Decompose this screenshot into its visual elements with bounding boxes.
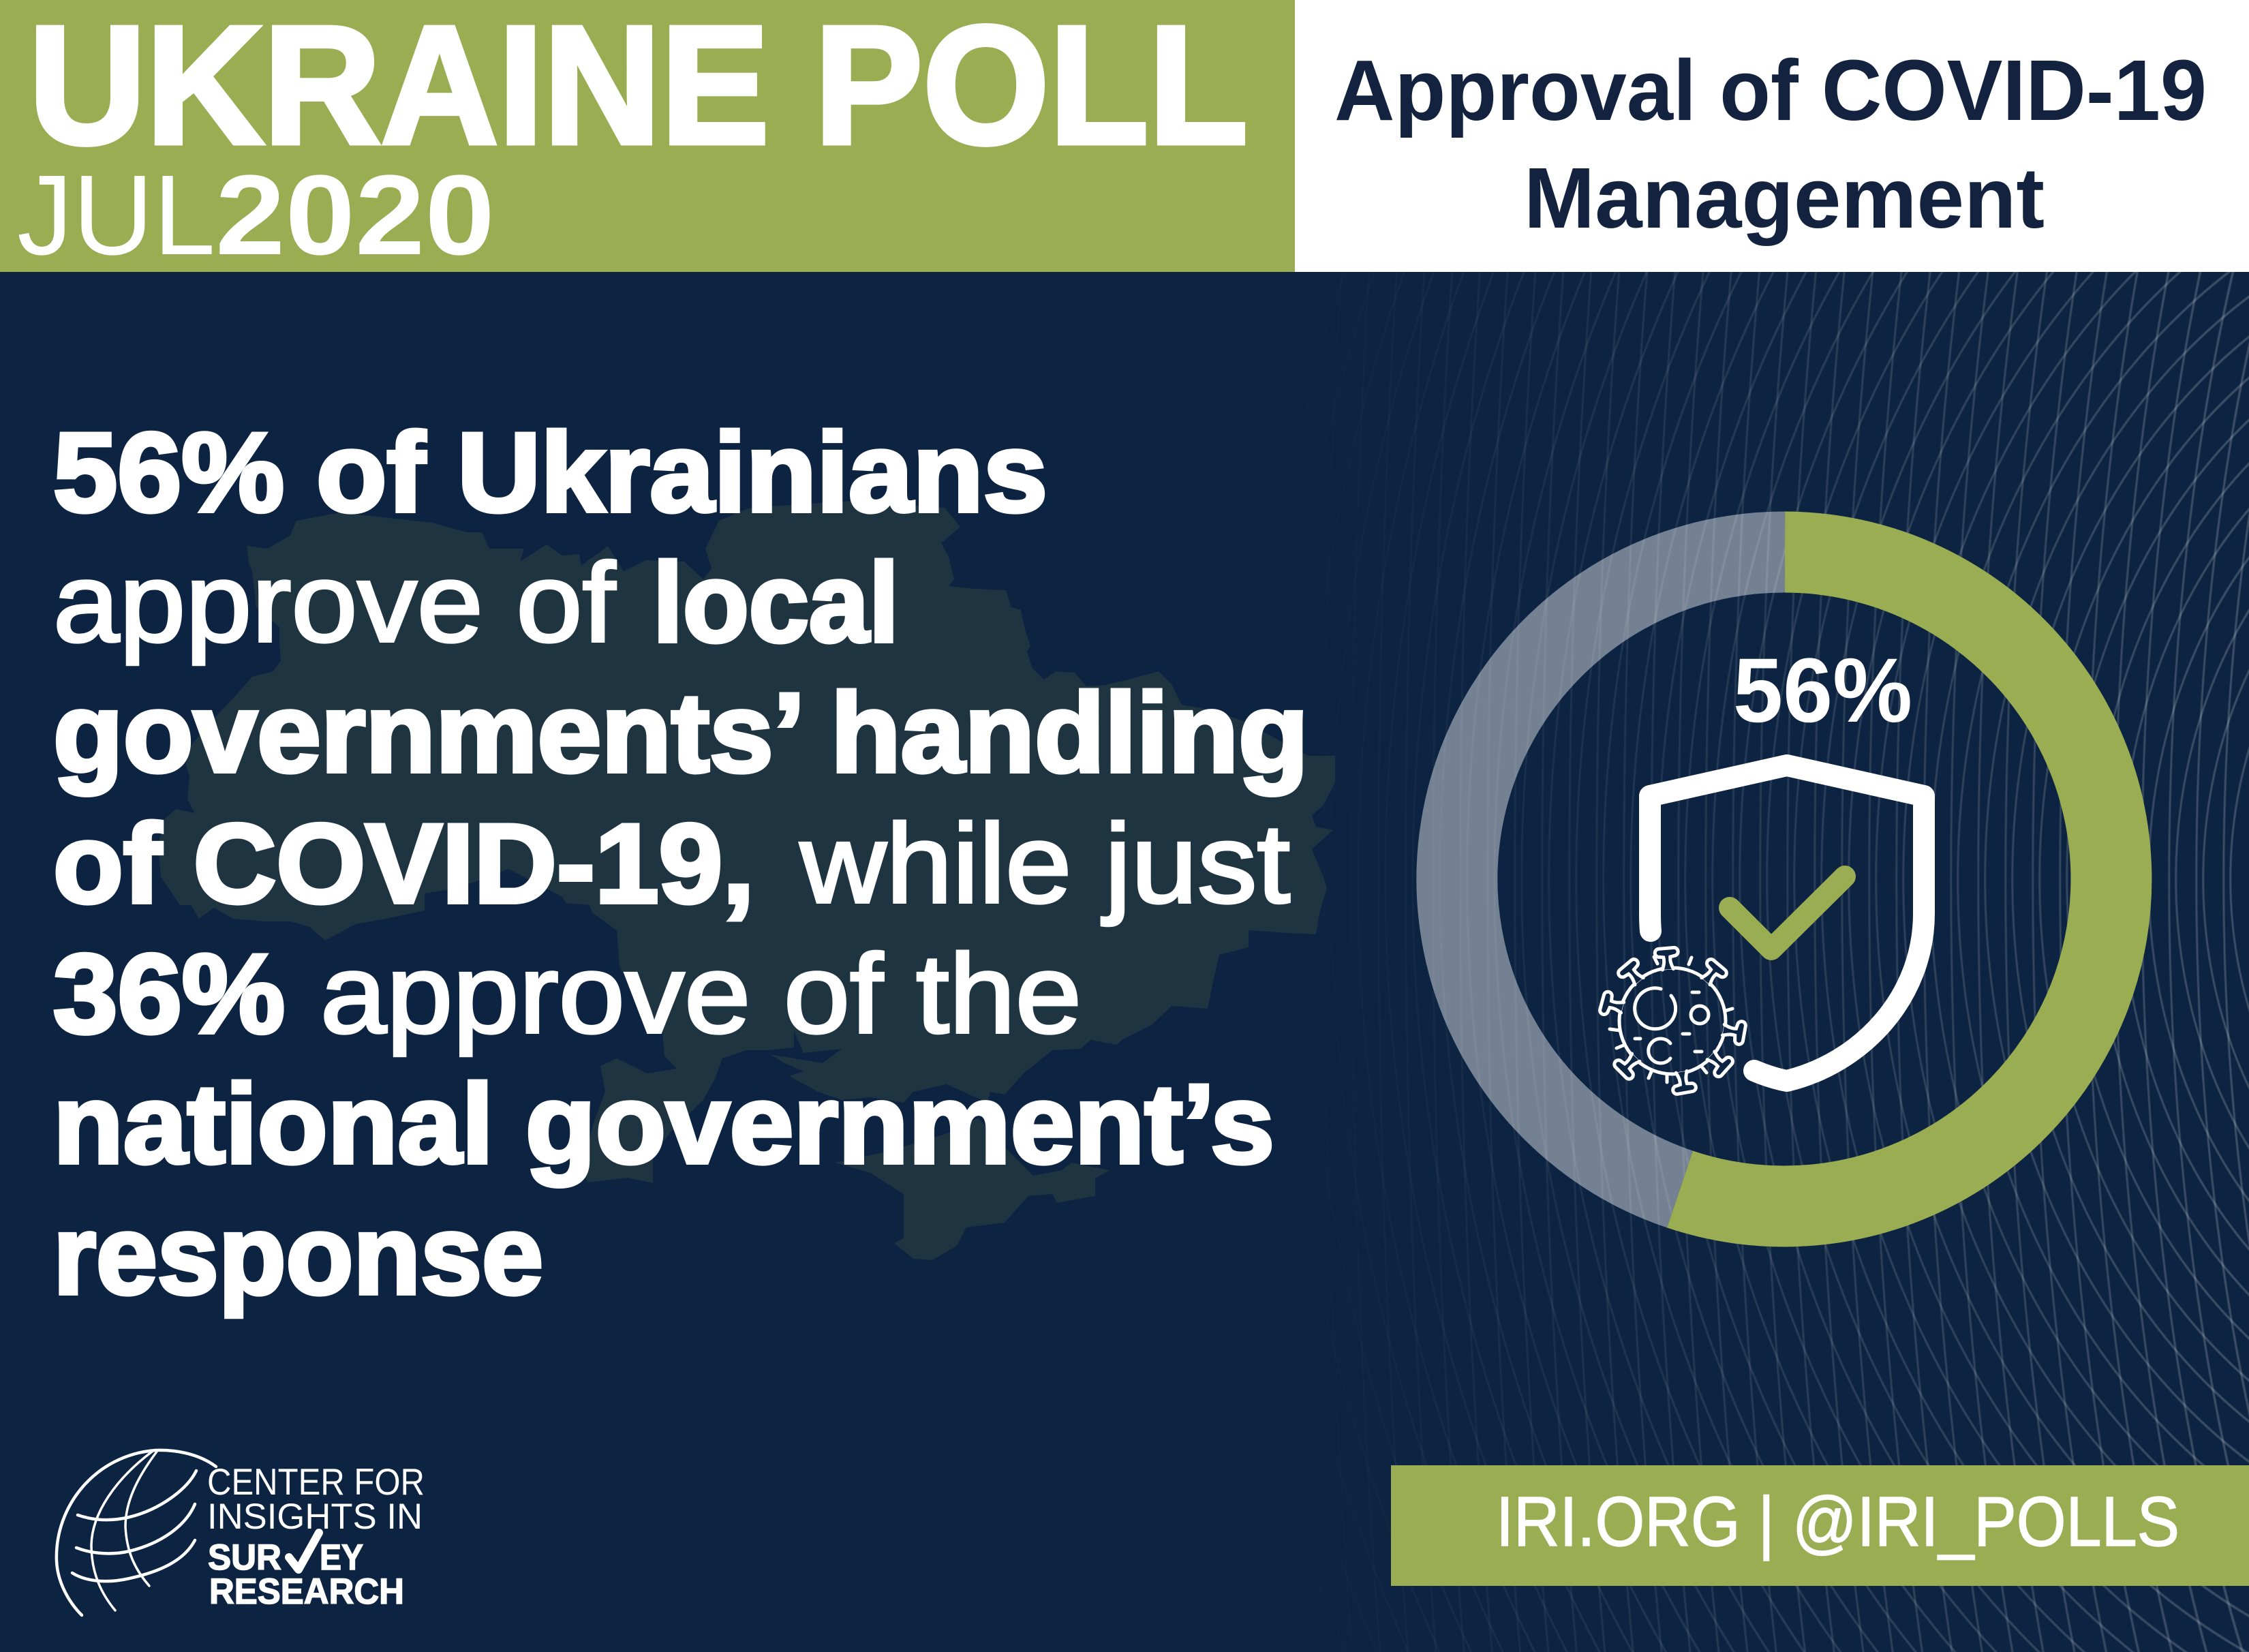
main statement text block: response [53, 1192, 543, 1317]
main statement text block: 56% of Ukrainians [53, 410, 1047, 535]
heading: Approval of COVID-19 Management: Management [1524, 150, 2045, 246]
panel: subject heading [1295, 0, 2249, 272]
main statement text block: local [653, 540, 899, 665]
logo globe [57, 1450, 216, 1615]
logo wordmark [207, 1460, 425, 1612]
date: JUL 2020: 2020 [215, 152, 495, 279]
main statement text block [53, 410, 1309, 1317]
logo check mark [289, 1533, 319, 1570]
logo: Center for Insights in Survey Research [57, 1450, 425, 1615]
main statement text block: of COVID-19, [53, 801, 754, 926]
footer text: IRI.ORG | @IRI_POLLS [1496, 1482, 2179, 1561]
main statement text block: approve of the [320, 931, 1082, 1056]
main statement text block: 36% [53, 931, 285, 1056]
main statement text block: approve of [53, 540, 616, 665]
approval ring segment [1680, 552, 2111, 1206]
date: JUL 2020: JUL [17, 152, 215, 279]
logo wordmark: EY [320, 1538, 363, 1578]
icon: check mark [1730, 876, 1845, 949]
map of Ukraine silhouette [158, 501, 1335, 1260]
footer bar: website and handle [1391, 1465, 2249, 1586]
main statement text block: national government’s [53, 1061, 1274, 1187]
value label: 56%: 56% [1733, 640, 1912, 741]
logo wordmark: INSIGHTS IN [207, 1497, 423, 1537]
heading: Approval of COVID-19 Management: Approval of COVID-19 [1334, 42, 2207, 138]
donut chart: 56% approval [1457, 552, 2111, 1206]
logo wordmark: CENTER FOR [207, 1460, 425, 1503]
main statement text block: governments’ handling [53, 670, 1309, 795]
icon: virus [1599, 947, 1746, 1095]
logo wordmark: SUR [208, 1538, 281, 1578]
heading: Approval of COVID-19 Management [1334, 42, 2207, 246]
remaining share ring segment [1457, 552, 1785, 1189]
date: JUL 2020 [17, 152, 495, 279]
main statement text block: while just [799, 801, 1290, 926]
icon: shield [1650, 765, 1924, 1081]
panel: green title header [0, 0, 1295, 279]
logo wordmark: RESEARCH [209, 1572, 404, 1612]
